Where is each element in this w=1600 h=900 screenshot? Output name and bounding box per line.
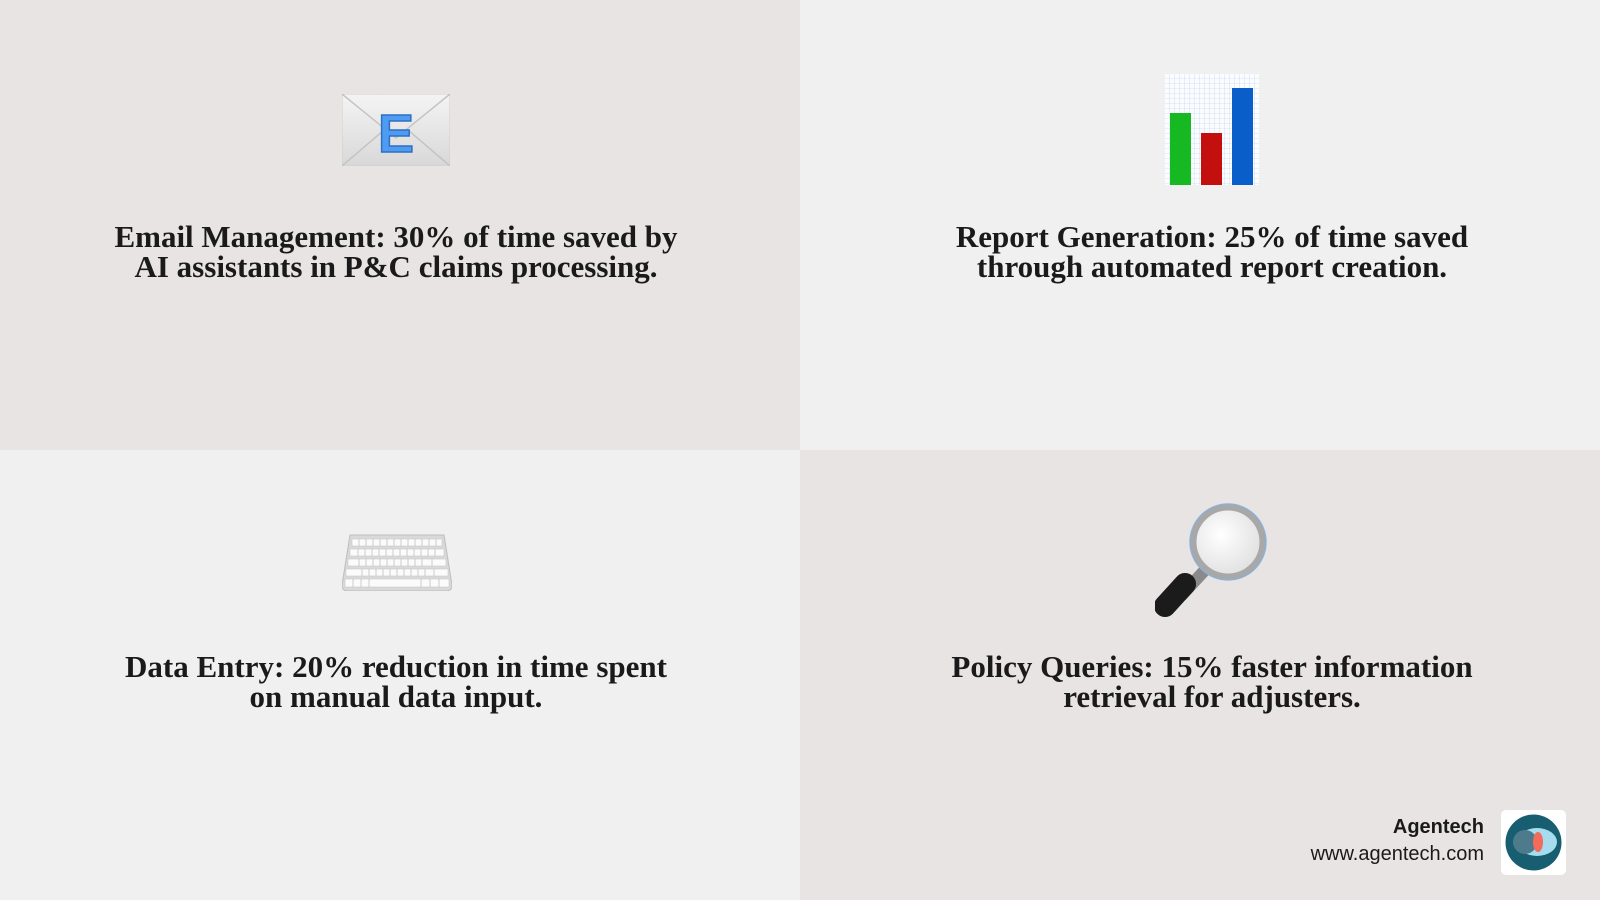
text: email management: AI assistants in P&C claims processing.	[134, 249, 658, 284]
icon: logo	[1501, 810, 1566, 875]
icon: envelope	[342, 94, 450, 166]
text: policy queries: retrieval for adjusters.	[1063, 679, 1361, 714]
text: report generation: through automated report creation.	[977, 249, 1447, 284]
icon: magnifier	[1155, 503, 1267, 617]
text: brand name: Agentech	[1393, 816, 1484, 838]
brand: agentech	[1310, 810, 1566, 875]
text: report generation: Report Generation: 25% of time saved	[956, 219, 1468, 254]
panel: policy queries	[800, 450, 1600, 900]
panel: data entry	[0, 450, 800, 900]
panel: report generation	[800, 0, 1600, 450]
icon: keyboard	[342, 534, 452, 591]
text: data entry	[125, 649, 667, 714]
text: report generation	[956, 219, 1468, 284]
text: email management: Email Management: 30% of time saved by	[114, 219, 678, 254]
text: email management	[114, 219, 678, 284]
text: data entry: on manual data input.	[250, 679, 542, 714]
panel: email management	[0, 0, 800, 450]
text: data entry: Data Entry: 20% reduction in time spent	[125, 649, 667, 684]
icon: bar chart	[1165, 74, 1259, 185]
text: url: www.agentech.com	[1311, 843, 1484, 865]
text: policy queries: Policy Queries: 15% faster information	[951, 649, 1473, 684]
icon: envelope: E	[378, 104, 414, 164]
text: policy queries	[951, 649, 1473, 714]
